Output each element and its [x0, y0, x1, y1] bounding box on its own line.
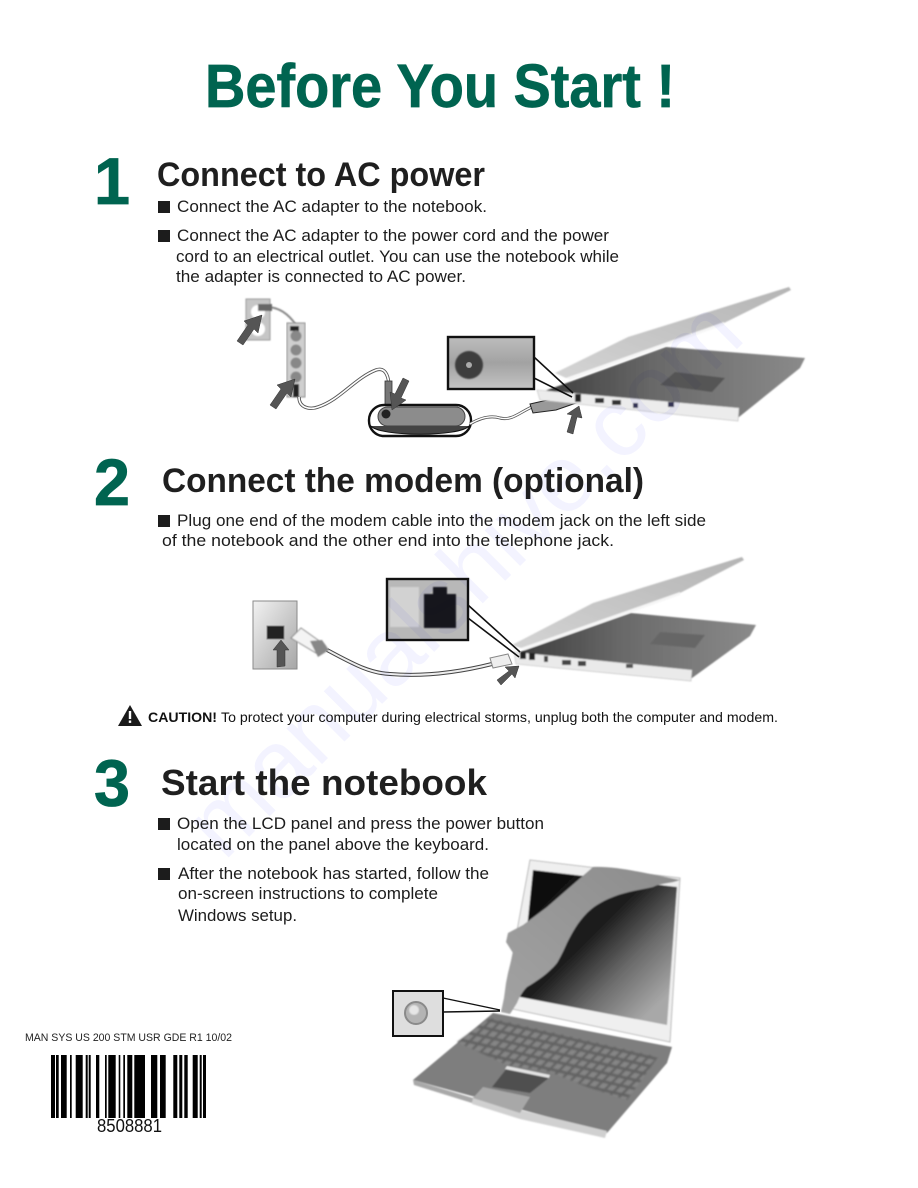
notebook lid	[503, 860, 680, 1042]
diagram: power connection	[237, 287, 805, 436]
bullet list: start instructions: After the notebook has started, follow the	[178, 865, 489, 883]
photo: open notebook with hand pressing power button	[413, 860, 680, 1138]
bullet list: start instructions: on-screen instructions to complete	[178, 885, 438, 903]
step number 1: 1	[94, 144, 130, 218]
caution note: CAUTION!	[148, 709, 217, 725]
bullet list: AC instructions	[158, 198, 619, 286]
icon: plug into adapter	[385, 381, 392, 405]
icon: DC plug	[530, 396, 579, 413]
bullet: modem instructions: of the notebook and the other end into the telephone jack.	[162, 532, 614, 550]
caution note: To protect your computer during electrical storms, unplug both the computer and modem.	[221, 709, 778, 725]
modem cable	[327, 650, 492, 675]
bullet list: AC instructions: Connect the AC adapter to the power cord and the power	[177, 227, 610, 245]
icon: cable plug, wall end	[291, 628, 329, 657]
icon: telephone wall jack	[253, 601, 297, 669]
bullet: modem instructions: Plug one end of the modem cable into the modem jack on the left side	[177, 512, 706, 530]
laptop side view, power	[537, 287, 805, 421]
laptop side view, modem	[512, 557, 756, 681]
bullet list: start instructions	[158, 815, 544, 925]
bullet list: start instructions: located on the panel above the keyboard.	[177, 836, 489, 854]
barcode	[51, 1055, 206, 1136]
step number 3: 3	[94, 746, 130, 820]
bullet list: AC instructions: cord to an electrical outlet. You can use the notebook while	[176, 248, 619, 266]
notebook touchpad	[492, 1068, 550, 1093]
bullet list: start instructions: Open the LCD panel and press the power button	[177, 815, 544, 833]
step number 2: 2	[94, 445, 130, 519]
section 3: start the notebook	[94, 746, 680, 1138]
dc cord	[470, 407, 532, 424]
notebook base	[413, 1013, 672, 1133]
icon: power strip	[287, 323, 305, 397]
notebook screen	[520, 870, 677, 1025]
part number label: MAN SYS US 200 STM USR GDE R1 10/02	[25, 1032, 232, 1044]
icon: AC adapter	[369, 405, 471, 436]
heading: connect the modem: Connect the modem (optional)	[162, 462, 644, 500]
section 2: connect the modem	[94, 445, 756, 685]
watermark: manualshive.com	[164, 279, 762, 877]
notebook keyboard	[457, 1018, 658, 1100]
icon: cable plug, laptop end	[490, 654, 512, 668]
inset: power button	[393, 991, 500, 1036]
barcode: 8508881	[97, 1115, 162, 1136]
section 1: connect to AC power	[94, 144, 805, 436]
heading: connect to AC power: Connect to AC power	[157, 156, 485, 194]
bullet: modem instructions	[158, 512, 706, 550]
title: Before You Start !	[205, 52, 675, 120]
icon: warning triangle	[118, 705, 142, 726]
icon: wall outlet	[246, 299, 296, 340]
power cord	[299, 369, 389, 408]
bullet list: start instructions: Windows setup.	[178, 907, 297, 925]
inset: power jack	[448, 337, 573, 397]
caution note	[118, 705, 778, 726]
bullet list: AC instructions: the adapter is connected to AC power.	[176, 268, 466, 286]
bullet list: AC instructions: Connect the AC adapter to the notebook.	[177, 198, 487, 216]
inset: modem jack	[387, 579, 520, 657]
arrows: modem plug points	[273, 640, 519, 685]
diagram: modem connection	[253, 557, 756, 685]
heading: start the notebook: Start the notebook	[161, 762, 488, 803]
hand and arm	[501, 867, 680, 1014]
arrows: plug in points	[237, 315, 582, 434]
